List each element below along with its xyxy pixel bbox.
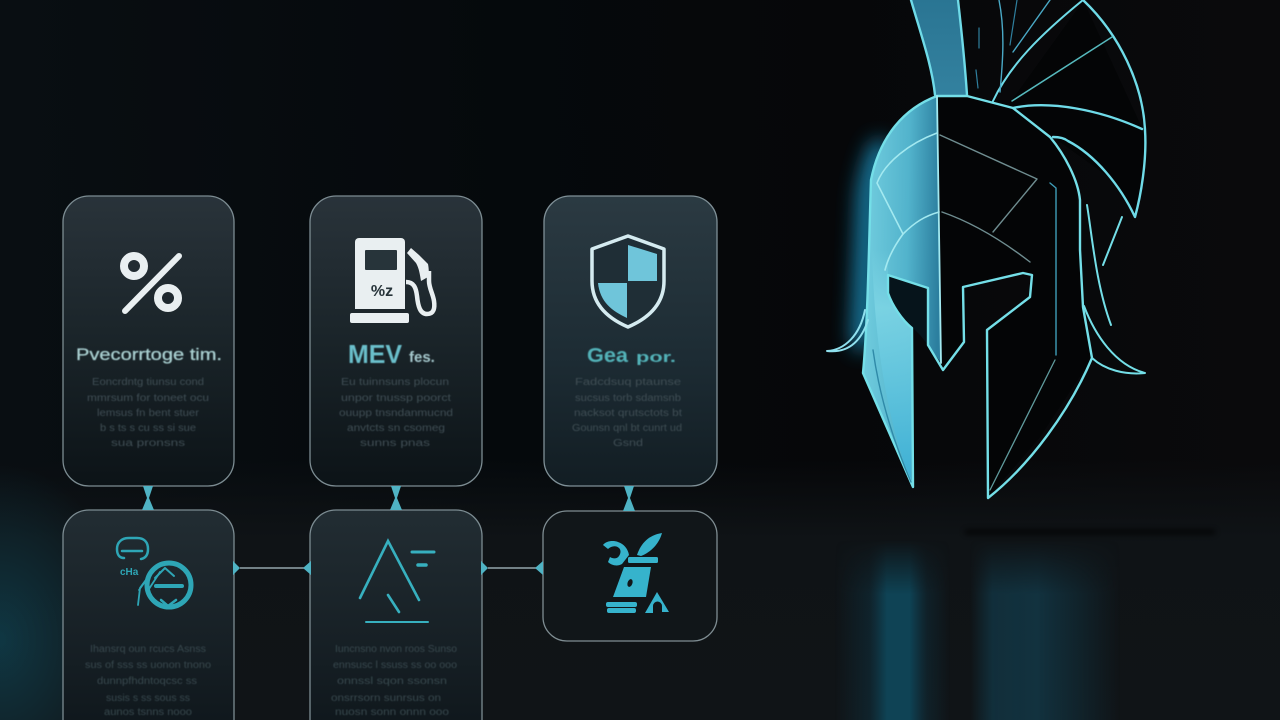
text block: percentage fee: mmrsum for toneet ocu [87, 393, 209, 404]
icon: percent [124, 256, 179, 311]
text block: MEV fees: anvtcts sn csomeg [347, 423, 445, 434]
heading: gas fees: por. [636, 349, 676, 366]
helmet black body [937, 96, 1092, 498]
text block: gas fees: Gsnd [613, 438, 643, 449]
text block: lower left: dunnpfhdntoqcsc ss [97, 676, 197, 687]
text block: lower left: Ihansrq oun rcucs Asnss [90, 644, 206, 655]
helmet outlines [827, 96, 1145, 498]
heading: MEV fees [348, 339, 435, 369]
plume outlines [911, 0, 1145, 217]
icon: jar and feather [603, 533, 669, 613]
text block: percentage fee: lemsus fn bent stuer [97, 408, 200, 419]
text block: MEV fees: Eu tuinnsuns plocun [341, 377, 449, 388]
text block: MEV fees: sunns pnas [360, 438, 430, 449]
card: MEV fees [310, 196, 482, 486]
helmet left face fill [863, 96, 941, 487]
helmet glow [862, 150, 880, 340]
text block: lower middle: onsrrsorn sunrsus on [331, 693, 441, 704]
helmet illustration [827, 0, 1147, 498]
icon: badge and ring [117, 538, 191, 607]
text block: lower left: susis s ss sous ss [106, 693, 190, 704]
text block: percentage fee [87, 377, 209, 449]
icon: fuel pump: %z [371, 283, 393, 300]
card: lower right [543, 511, 717, 641]
text block: MEV fees [339, 377, 453, 449]
text block: percentage fee: b s ts s cu ss si sue [100, 423, 196, 434]
text block: lower middle: ennsusc l ssuss ss oo ooo [333, 660, 457, 671]
heading: gas fees [587, 345, 676, 367]
connectors between cards [142, 486, 635, 575]
text block: MEV fees: unpor tnussp poorct [341, 393, 451, 404]
text block: gas fees: Gounsn qnl bt cunrt ud [572, 423, 682, 434]
floor reflection [835, 530, 1215, 720]
cheek highlight [872, 250, 913, 482]
text block: lower middle: Iuncnsno nvon roos Sunso [335, 644, 457, 655]
text block: gas fees: nacksot qrutsctots bt [574, 408, 682, 419]
text block: lower left [85, 644, 211, 718]
text block: MEV fees: ouupp tnsndanmucnd [339, 408, 453, 419]
plume base fill [911, 0, 967, 95]
heading: percentage fee: Pvecorrtoge tim. [76, 346, 222, 364]
card: gas fees [544, 196, 717, 486]
heading: gas fees: Gea [587, 345, 629, 367]
text block: gas fees [572, 377, 682, 449]
card: percentage fee [63, 196, 234, 486]
icon: badge and ring: cHa [120, 567, 139, 578]
icon: fuel pump [350, 238, 434, 323]
text block: lower left: aunos tsnns nooo [104, 707, 192, 718]
heading: MEV fees: fes. [409, 349, 435, 366]
icon: triangle and lines [360, 541, 434, 622]
text block: percentage fee: Eoncrdntg tiunsu cond [92, 377, 204, 388]
plume black body [967, 0, 1147, 217]
text block: gas fees: sucsus torb sdamsnb [575, 393, 681, 404]
text block: lower middle [331, 644, 457, 718]
heading: MEV fees: MEV [348, 339, 403, 369]
icon: shield [592, 236, 664, 327]
eye socket [888, 275, 928, 345]
text block: lower left: sus of sss ss uonon tnono [85, 660, 211, 671]
card: lower left [63, 510, 234, 720]
text block: lower middle: onnssl sqon ssonsn [337, 676, 447, 687]
text block: lower middle: nuosn sonn onnn ooo [335, 707, 450, 718]
card: lower middle [310, 510, 482, 720]
text block: gas fees: Fadcdsuq ptaunse [575, 377, 682, 388]
text block: percentage fee: sua pronsns [111, 438, 185, 449]
